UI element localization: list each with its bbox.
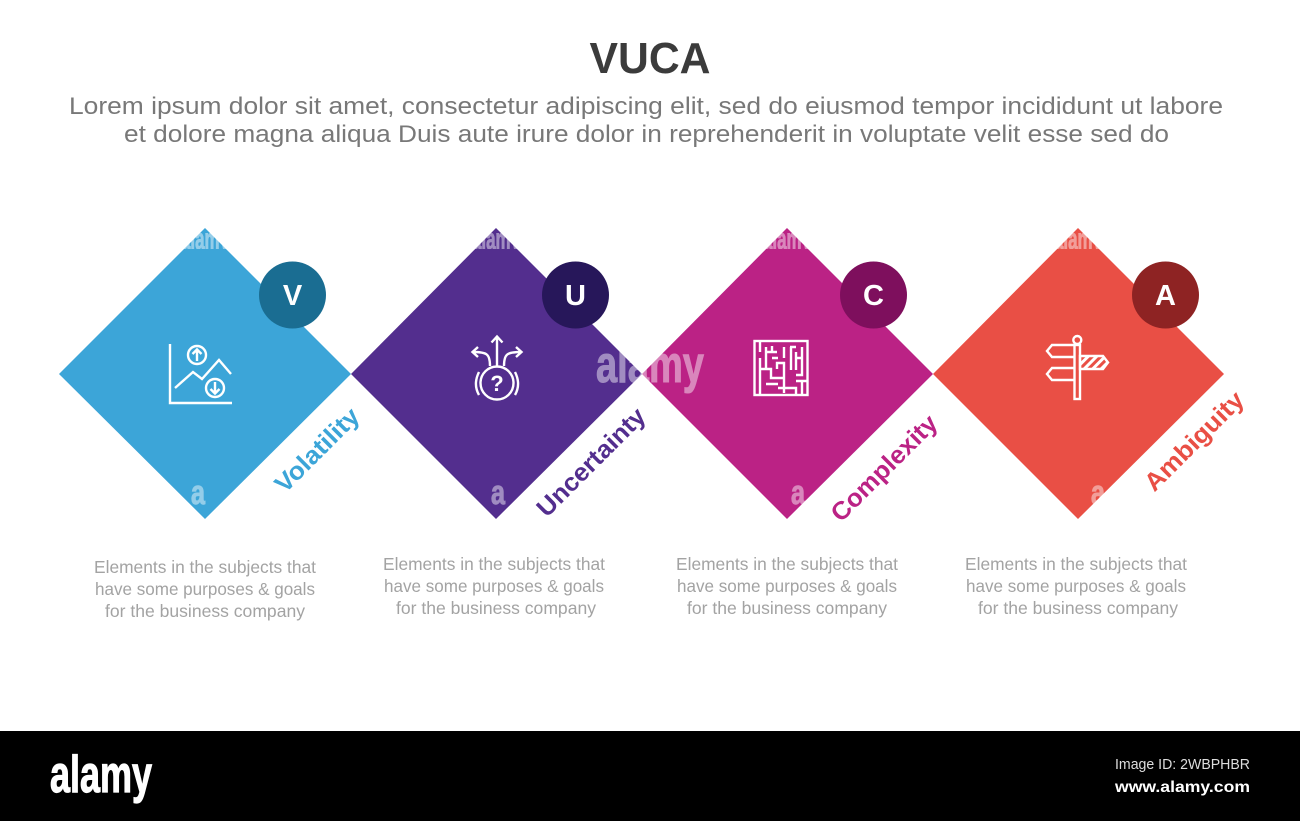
icon: signpost xyxy=(1047,336,1108,399)
description: complexity: have some purposes & goals xyxy=(677,576,897,596)
description: uncertainty: for the business company xyxy=(396,598,596,618)
diamond: volatility xyxy=(59,228,351,519)
watermark overlay: a xyxy=(491,474,506,512)
icon: question mark with branching arrows: ? xyxy=(490,371,504,396)
badge: C: C xyxy=(863,280,884,312)
icon: chart with up and down arrows xyxy=(170,344,232,403)
description: uncertainty: Elements in the subjects that xyxy=(383,554,605,574)
description: uncertainty xyxy=(383,554,605,618)
description: complexity: Elements in the subjects that xyxy=(676,554,898,574)
title: VUCA xyxy=(590,34,710,83)
watermark overlay: a xyxy=(791,474,806,512)
badge: V xyxy=(259,262,326,328)
watermark overlay: alamy xyxy=(1054,223,1102,256)
panel: volatility xyxy=(59,228,365,621)
watermark overlay: a xyxy=(191,474,206,512)
panel: uncertainty xyxy=(351,228,652,618)
label: Complexity: Complexity xyxy=(825,409,943,527)
badge: U: U xyxy=(565,280,586,312)
badge: A xyxy=(1132,262,1199,328)
badge: V: V xyxy=(283,280,303,312)
panel: complexity xyxy=(642,228,943,618)
image id: Image ID: 2WBPHBR xyxy=(1115,756,1250,773)
description: ambiguity: for the business company xyxy=(978,598,1178,618)
website: www.alamy.com xyxy=(1114,779,1250,796)
watermark overlay: alamy xyxy=(181,223,229,256)
description: volatility: for the business company xyxy=(105,601,305,621)
icon: maze xyxy=(754,341,808,395)
subtitle text: Lorem ipsum dolor sit amet, consectetur adipiscing elit, sed do eiusmod tempor incididunt ut labore xyxy=(69,93,1223,120)
description: uncertainty: have some purposes & goals xyxy=(384,576,604,596)
badge: C xyxy=(840,262,907,328)
description: volatility xyxy=(94,557,316,621)
description: complexity xyxy=(676,554,898,618)
description: ambiguity: have some purposes & goals xyxy=(966,576,1186,596)
subtitle text: et dolore magna aliqua Duis aute irure dolor in reprehenderit in voluptate velit esse sed do xyxy=(124,121,1169,148)
watermark overlay: alamy xyxy=(472,223,520,256)
description: volatility: have some purposes & goals xyxy=(95,579,315,599)
description: complexity: for the business company xyxy=(687,598,887,618)
badge: A: A xyxy=(1155,280,1176,312)
label: Uncertainty: Uncertainty xyxy=(531,402,652,522)
footer bar xyxy=(0,731,1300,821)
panel: ambiguity xyxy=(933,228,1250,618)
subtitle text xyxy=(69,93,1223,148)
footer logo: alamy xyxy=(50,746,152,804)
watermark overlay: alamy xyxy=(763,223,811,256)
badge: U xyxy=(542,262,609,328)
label: Ambiguity: Ambiguity xyxy=(1139,386,1250,497)
description: ambiguity: Elements in the subjects that xyxy=(965,554,1187,574)
diamond: ambiguity xyxy=(933,228,1224,519)
diamond: complexity xyxy=(642,228,933,519)
watermark overlay: alamy xyxy=(596,336,704,394)
watermark overlay xyxy=(181,223,1106,512)
description: volatility: Elements in the subjects that xyxy=(94,557,316,577)
watermark overlay: a xyxy=(1091,474,1106,512)
label: Volatility: Volatility xyxy=(269,402,365,498)
icon: question mark with branching arrows xyxy=(472,336,522,400)
diamond: uncertainty xyxy=(351,228,642,519)
description: ambiguity xyxy=(965,554,1187,618)
